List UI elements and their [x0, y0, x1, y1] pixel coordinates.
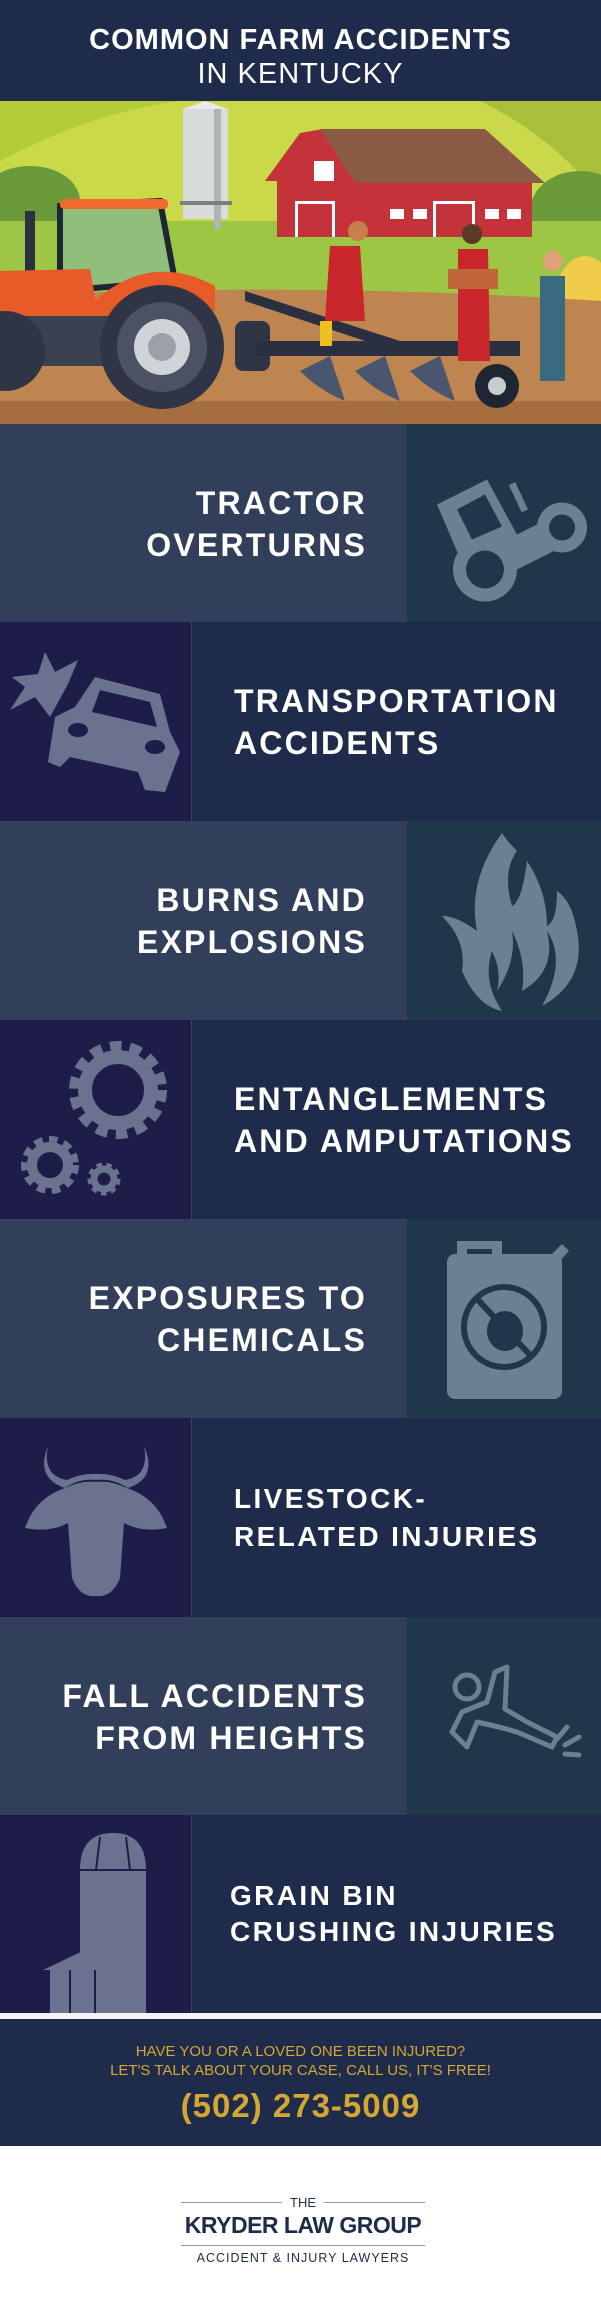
row: entanglements	[0, 1020, 601, 1219]
text: tractor overturns: OVERTURNS	[146, 526, 367, 562]
logo: ACCIDENT & INJURY LAWYERS	[197, 2251, 409, 2265]
icon: gears	[21, 1041, 167, 1196]
row: transportation accidents	[0, 622, 601, 821]
text: fall accidents from heights	[62, 1678, 367, 1756]
text: grain bin crushing injuries	[230, 1880, 557, 1947]
icon: grain silo	[43, 1833, 146, 2013]
illustration: farm scene	[0, 101, 601, 424]
row: tractor overturns	[0, 424, 601, 622]
text: burns and explosions: BURNS AND	[156, 882, 367, 918]
header: title: COMMON FARM ACCIDENTS	[89, 24, 512, 56]
call to action band	[0, 2019, 601, 2146]
header: title	[0, 0, 601, 101]
text: exposures to chemicals	[89, 1280, 367, 1358]
tractor	[25, 211, 35, 271]
text: exposures to chemicals: CHEMICALS	[157, 1322, 367, 1358]
text: entanglements and amputations	[234, 1080, 574, 1158]
text: tractor overturns	[146, 484, 367, 562]
row: livestock	[0, 1418, 601, 1617]
text: transportation accidents: TRANSPORTATION	[234, 682, 559, 718]
text: grain bin crushing injuries: GRAIN BIN	[230, 1880, 398, 1911]
text: exposures to chemicals: EXPOSURES TO	[89, 1280, 367, 1316]
header: title: IN KENTUCKY	[198, 58, 403, 90]
barn	[265, 129, 355, 181]
row: grain bin	[0, 1815, 601, 2013]
icon: bull head	[25, 1446, 167, 1596]
cta text: HAVE YOU OR A LOVED ONE BEEN INJURED?	[136, 2043, 465, 2060]
cta text	[110, 2043, 491, 2079]
text: entanglements and amputations: ENTANGLEMENTS	[234, 1080, 548, 1116]
text: fall accidents from heights: FROM HEIGHTS	[95, 1720, 367, 1756]
text: tractor overturns: TRACTOR	[196, 484, 367, 520]
row: falls	[0, 1617, 601, 1815]
logo	[181, 2195, 425, 2265]
divider line	[0, 2013, 601, 2019]
text: burns and explosions: EXPLOSIONS	[137, 924, 367, 960]
icon: car crash	[10, 652, 180, 792]
hay bale	[555, 256, 601, 346]
cta text: LET'S TALK ABOUT YOUR CASE, CALL US, IT'S FREE!	[110, 2062, 491, 2079]
phone number: (502) 273-5009	[181, 2087, 420, 2124]
text: burns and explosions	[137, 882, 367, 960]
text: livestock-related injuries: RELATED INJURIES	[234, 1520, 539, 1552]
text: transportation accidents	[234, 682, 559, 760]
row: burns and explosions	[0, 821, 601, 1020]
icon: chemical canister	[447, 1241, 569, 1399]
ground	[0, 290, 601, 424]
logo: KRYDER LAW GROUP	[185, 2212, 421, 2238]
text: livestock-related injuries: LIVESTOCK-	[234, 1482, 427, 1514]
text: livestock-related injuries	[234, 1482, 539, 1552]
icon: falling person	[450, 1664, 582, 1758]
text: entanglements and amputations: AND AMPUTATIONS	[234, 1122, 574, 1158]
logo: THE	[290, 2195, 316, 2210]
silo	[183, 109, 228, 219]
plow	[235, 321, 270, 371]
people	[348, 221, 368, 241]
row: chemicals	[0, 1219, 601, 1418]
text: transportation accidents: ACCIDENTS	[234, 724, 440, 760]
text: fall accidents from heights: FALL ACCIDENTS	[62, 1678, 367, 1714]
icon: tipped tractor	[437, 480, 587, 602]
icon: flame	[442, 833, 579, 1011]
text: grain bin crushing injuries: CRUSHING INJURIES	[230, 1916, 557, 1947]
